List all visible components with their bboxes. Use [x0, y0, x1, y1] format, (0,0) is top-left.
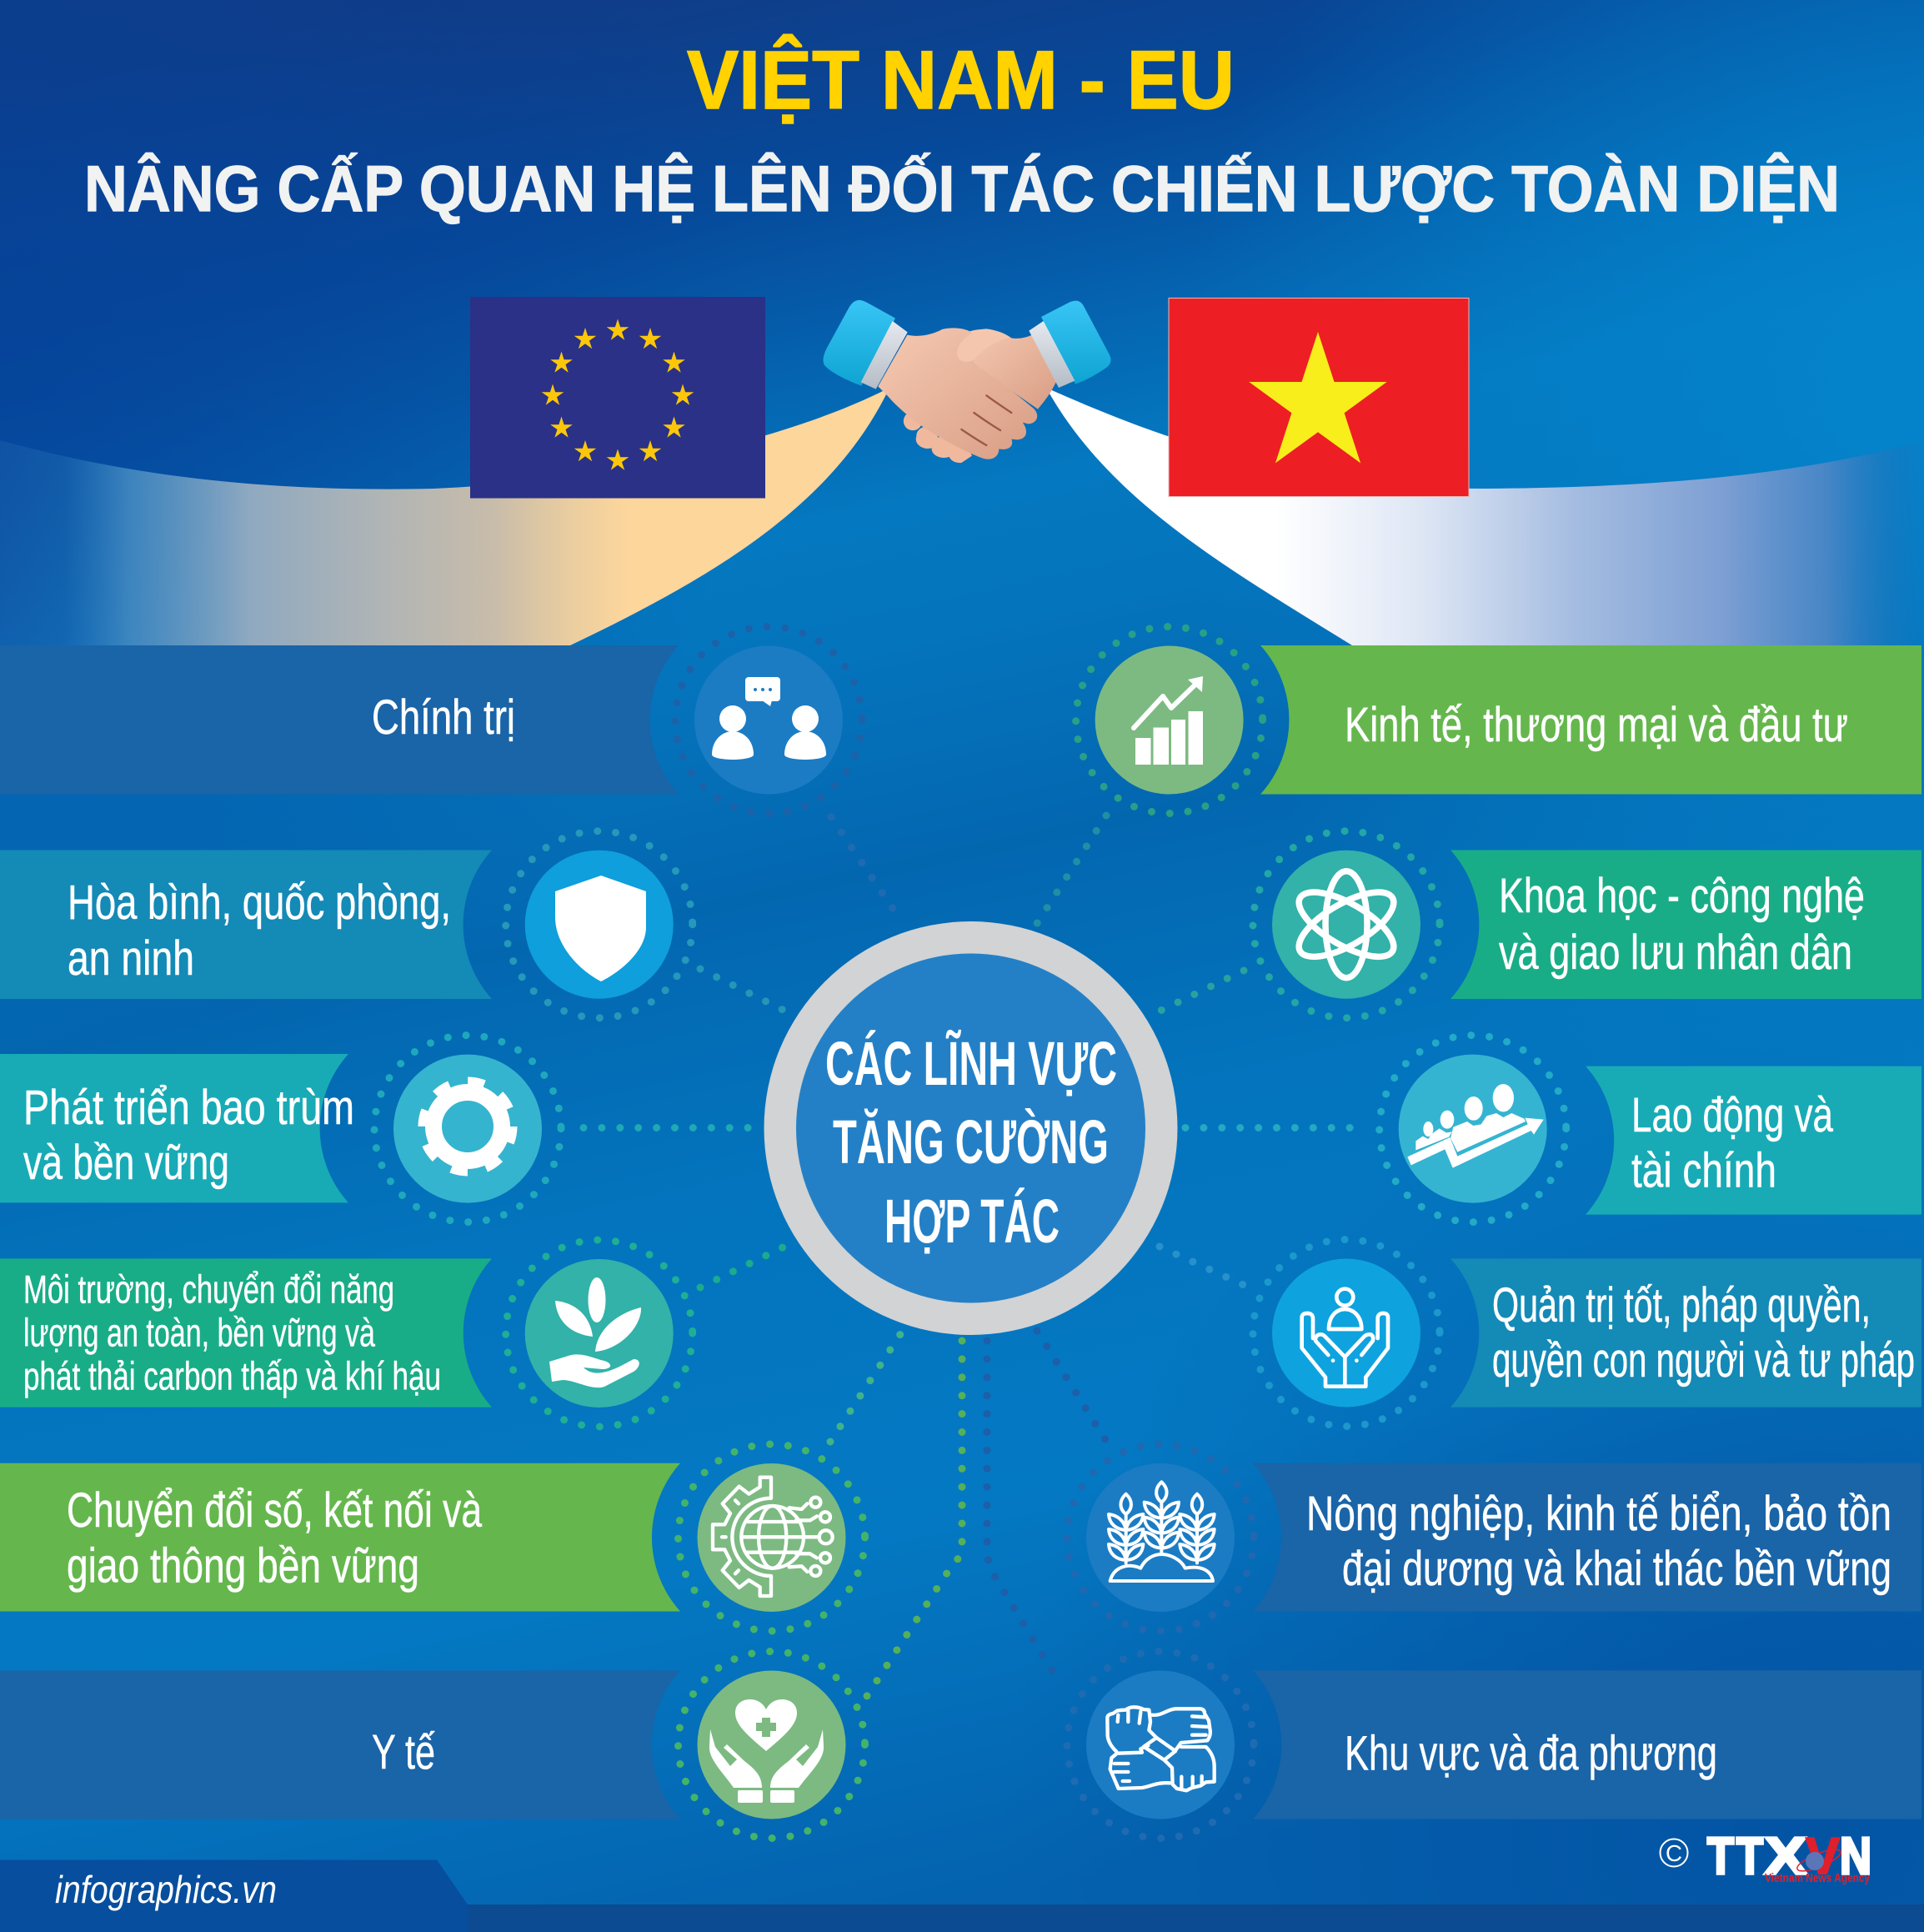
icon: team and rising arrow [1407, 1084, 1544, 1168]
band [0, 1670, 680, 1819]
icon: heart in hands [709, 1699, 824, 1803]
title: VIỆT NAM - EU [687, 33, 1235, 126]
central circle [764, 921, 1177, 1335]
label: phát thải carbon thấp và khí hậu [23, 1354, 441, 1398]
dotted ring [679, 1651, 865, 1838]
label: Lao động và [1631, 1088, 1834, 1142]
label: lượng an toàn, bền vững và [23, 1311, 376, 1355]
icon: atom [1290, 871, 1403, 978]
label: an ninh [68, 931, 194, 986]
peach mountain [0, 388, 889, 645]
icon: wheat [1109, 1482, 1215, 1581]
copyright logo TTXVN: V [1806, 1828, 1840, 1885]
label: Y tế [372, 1725, 435, 1779]
label: Phát triển bao trùm [23, 1081, 354, 1135]
icon: person in hands [1302, 1289, 1388, 1387]
icon circle [1272, 1259, 1420, 1408]
central heading: TĂNG CƯỜNG [833, 1107, 1109, 1177]
connector dots [584, 815, 1357, 1699]
Vietnam flag [1169, 299, 1469, 497]
icon circle [1086, 1671, 1235, 1819]
band [1451, 851, 1921, 999]
panel: Phát triển bao trùm và bền vững [0, 1036, 561, 1222]
dotted ring [675, 627, 862, 814]
band [1253, 1670, 1921, 1819]
label: Hòa bình, quốc phòng, [68, 876, 451, 930]
dotted ring [1380, 1036, 1566, 1222]
panel: Quản trị tốt [1253, 1239, 1921, 1426]
label: Chính trị [372, 690, 515, 745]
footer bar [0, 1859, 1924, 1932]
label: giao thông bền vững [67, 1539, 419, 1593]
copyright logo TTXVN: T [1707, 1828, 1734, 1885]
icon circle [393, 1055, 542, 1203]
icon: gear [423, 1081, 513, 1172]
icon circle [697, 1463, 845, 1612]
dotted ring [1253, 1239, 1440, 1426]
panel: Kinh tế, thương mại và đầu tư [1076, 627, 1921, 814]
band [0, 1463, 680, 1611]
label [1306, 1487, 1891, 1596]
footer website: infographics.vn [55, 1868, 277, 1911]
panel: Chính trị [0, 627, 862, 814]
band [0, 645, 679, 794]
label: Khu vực và đa phương [1345, 1726, 1717, 1781]
panel: Môi trường [0, 1240, 693, 1427]
panel: Khoa học - công nghệ [1253, 831, 1921, 1018]
icon: people talking [712, 677, 826, 760]
central heading: CÁC LĨNH VỰC [825, 1029, 1117, 1098]
icon: shield [555, 876, 646, 981]
icon: plant in hand [549, 1277, 641, 1388]
dotted ring [506, 1240, 693, 1427]
handshake icon [823, 300, 1111, 463]
panel: Chuyển đổi số [0, 1444, 865, 1631]
panel: Lao động và tài chính [1380, 1036, 1921, 1222]
dotted ring [1076, 627, 1263, 814]
label [23, 1267, 441, 1398]
copyright logo TTXVN: X [1765, 1828, 1806, 1885]
central heading: HỢP TÁC [884, 1187, 1060, 1256]
white mountain [1046, 388, 1924, 645]
icon circle [1272, 851, 1420, 999]
dotted ring [506, 831, 693, 1018]
band [1451, 1258, 1921, 1408]
panel: Y tế [0, 1651, 865, 1838]
central heading [825, 1029, 1117, 1256]
label [68, 876, 451, 986]
panel: Nông nghiệp [1067, 1444, 1921, 1631]
copyright logo TTXVN [1661, 1828, 1871, 1885]
label: và bền vững [23, 1136, 229, 1190]
band [1253, 1463, 1921, 1611]
dotted ring [1067, 1444, 1254, 1631]
label: Môi trường, chuyển đổi năng [23, 1267, 394, 1311]
dotted ring [374, 1036, 561, 1222]
dotted ring [1067, 1651, 1254, 1838]
icon circle [525, 1259, 674, 1408]
icon circle [1399, 1055, 1547, 1203]
icon: globe, gear and circuits [713, 1478, 833, 1596]
panel: Khu vực và đa phương [1067, 1651, 1921, 1838]
panel: Hòa bình, quốc phòng, an ninh [0, 831, 693, 1018]
copyright logo TTXVN: N [1840, 1828, 1871, 1885]
icon circle [1095, 645, 1244, 794]
icon circle [697, 1671, 845, 1819]
EU flag [470, 297, 765, 499]
label [1631, 1088, 1834, 1197]
band [1260, 645, 1921, 794]
copyright logo TTXVN: Vietnam News Agency [1765, 1871, 1871, 1885]
label: tài chính [1631, 1144, 1776, 1197]
label: Chuyển đổi số, kết nối và [67, 1483, 483, 1538]
icon circle [694, 645, 843, 794]
label [1492, 1278, 1915, 1388]
icon: joined hands [1107, 1707, 1215, 1790]
icon circle [1086, 1463, 1235, 1612]
label [67, 1483, 483, 1593]
icon circle [525, 851, 674, 999]
band [1586, 1066, 1921, 1215]
band [0, 1054, 348, 1202]
copyright logo TTXVN: C [1666, 1840, 1682, 1866]
label [23, 1081, 354, 1190]
copyright logo TTXVN: T [1736, 1828, 1763, 1885]
band [0, 851, 492, 999]
dotted ring [1253, 831, 1440, 1018]
dotted ring [679, 1444, 865, 1631]
icon: growth chart [1134, 676, 1203, 765]
label [1499, 869, 1865, 980]
band [0, 1258, 492, 1408]
